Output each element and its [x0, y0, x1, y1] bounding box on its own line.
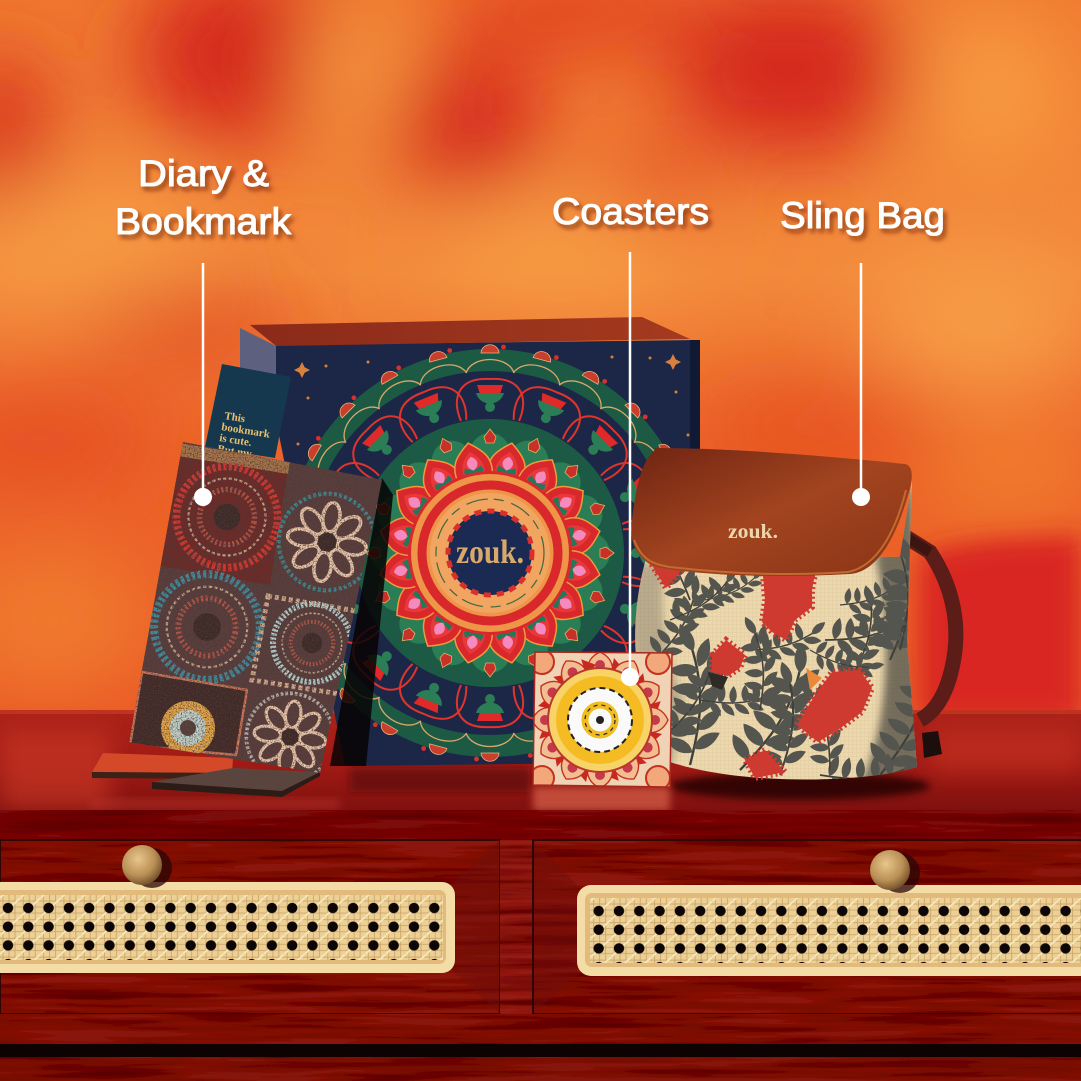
left drawer [0, 840, 500, 1014]
callout: diary and bookmark [115, 153, 292, 506]
knob right [870, 850, 920, 893]
table front rail [0, 810, 1081, 841]
gift box [240, 317, 700, 766]
cane panel right [577, 885, 1081, 976]
box logo: zouk. [456, 534, 524, 571]
coasters lying under diary [92, 753, 320, 797]
bookmark [205, 364, 291, 460]
diary middle right tile [252, 596, 362, 695]
bag dark side shading [862, 482, 917, 777]
callout: diary and bookmark: Bookmark [115, 201, 292, 242]
diary middle left tile [150, 570, 264, 684]
table top [0, 710, 1081, 812]
callout: diary and bookmark: Diary & [138, 153, 269, 194]
diary shadow on box [330, 478, 393, 766]
callout: coasters: Coasters [552, 191, 709, 232]
flap logo: zouk. [728, 521, 778, 543]
bookmark: But my [217, 443, 253, 460]
background: blurred orange and red wall [0, 0, 1081, 720]
box corner ornaments [294, 354, 690, 446]
centre post [500, 840, 533, 1014]
sling bag [631, 448, 964, 781]
diary top left tile [155, 443, 290, 585]
table lower rail [0, 1014, 1081, 1081]
knob left [122, 845, 172, 888]
diary bottom left tile [130, 672, 247, 755]
bookmark: bookmark [221, 421, 272, 441]
diary bottom right tile [244, 691, 332, 773]
bookmark: This [224, 410, 247, 425]
diary [129, 442, 383, 786]
right drawer [533, 840, 1081, 1014]
box mandala [282, 345, 698, 761]
bag flowers [650, 562, 872, 778]
callout: sling bag: Sling Bag [780, 195, 945, 236]
cane panel left [0, 882, 455, 973]
callout: sling bag [780, 195, 945, 506]
callout: coasters [552, 191, 709, 686]
bookmark: is cute. [219, 432, 253, 449]
bag strap [906, 537, 956, 758]
bag flap [631, 448, 912, 576]
diary top right tile [276, 492, 373, 592]
coaster front [529, 649, 672, 791]
bag body [635, 480, 917, 781]
